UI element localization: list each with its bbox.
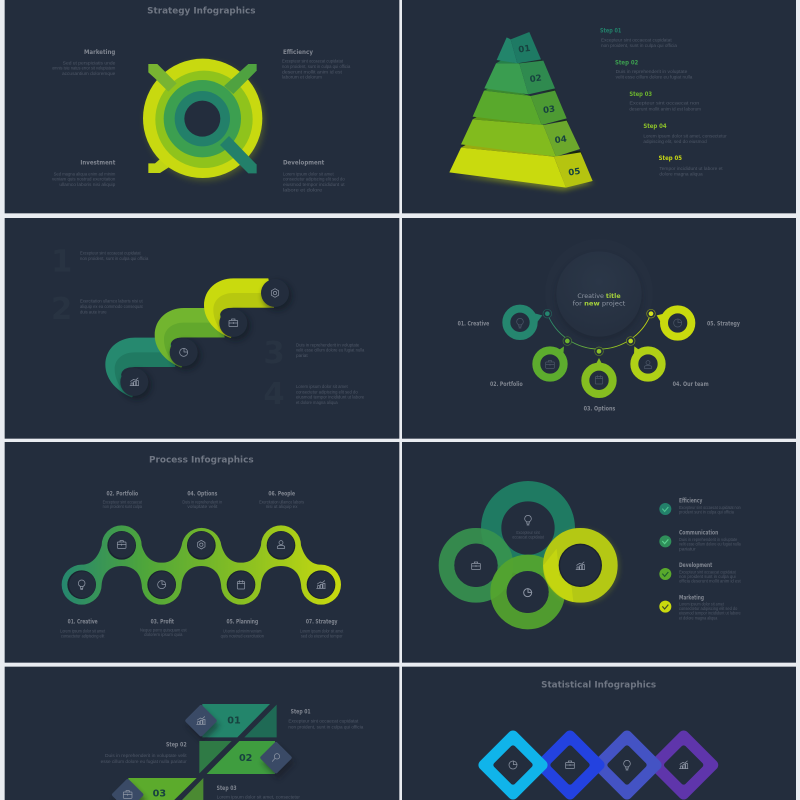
text block: Step 02 [615, 59, 693, 80]
tier 4 [461, 119, 580, 157]
text block: Step 01: Step 01 [291, 709, 311, 716]
hole: pie icon [492, 744, 534, 786]
numbered text: 4: eiusmod tempor incididunt ut labore [296, 395, 365, 400]
text block: Marketing: Marketing [84, 49, 115, 56]
text block: Step 04 [643, 123, 727, 144]
panel: strategy infographics [5, 0, 399, 213]
text block: Step 03: Lorem ipsum dolor sit amet, consectetur [217, 794, 301, 799]
text block: Marketing: omnis iste natus error sit voluptatem [52, 66, 116, 71]
numbered text: 3: velit esse cillum dolore eu fugiat nulla [296, 348, 365, 353]
numbered text: 3: pariat [296, 353, 308, 358]
label: 06. People: 06. People [268, 491, 295, 498]
step 03 shape: 03 [153, 789, 166, 800]
text block: Efficiency: non proident, sunt in culpa qui officia [282, 64, 351, 69]
diamond: indigo [590, 728, 664, 800]
label: 04. Options: voluptate velit [187, 504, 218, 509]
central hub [545, 239, 653, 347]
label: 02. Portfolio: 02. Portfolio [106, 491, 138, 498]
node: gear [187, 531, 216, 560]
hole: chart icon [663, 744, 704, 786]
option 03: Options [584, 347, 616, 412]
label: 03. Profit: dolorem ipsum quia [144, 632, 183, 637]
step 03 shape [111, 778, 203, 800]
panel: pyramid steps [402, 0, 796, 213]
label: 05. Planning: quis nostrud exercitation [221, 633, 264, 638]
label: 01. Creative: Lorem ipsum dolor sit amet [60, 628, 106, 633]
list item: Marketing: consectetur adipiscing elit sed do [679, 606, 738, 611]
ribbon: yellow [204, 278, 274, 338]
numbered text: 2: Exercitation ullamco laboris nisi ut [80, 299, 143, 304]
numbered text: 1: Excepteur sint occaecat cupidatat [80, 251, 141, 256]
list item: Marketing: Marketing [679, 595, 704, 602]
central hub: for new project [573, 301, 626, 308]
text block: Step 03: Step 03 [629, 91, 652, 98]
panel: radial options [402, 218, 796, 439]
ring: pie [498, 563, 557, 621]
text block: Development: consectetur adipiscing elit sed do [283, 177, 345, 182]
numbered text: 1: 1 [51, 244, 72, 279]
central hub: Creative title [577, 293, 621, 300]
text block: Step 01: Excepteur sint occaecat cupidatat [601, 37, 672, 42]
list item: Communication: pariatur [679, 546, 696, 551]
numbered text: 4 [263, 377, 365, 412]
text block: Investment: veniam quis nostrud exercitation [52, 177, 116, 182]
option 02: Portfolio [490, 337, 572, 388]
step 02 shape: 02 [239, 753, 252, 764]
label: 03. Profit: Neque porro quisquam est [140, 627, 187, 632]
label: 07. Strategy: 07. Strategy [306, 618, 338, 625]
text block: Development: eiusmod tempor incididunt ut [283, 182, 345, 187]
label: 07. Strategy: Lorem ipsum dolor sit amet [300, 628, 344, 633]
numbered text: 1 [51, 244, 149, 279]
numbered text: 3 [263, 336, 365, 371]
text block: Investment: ullamco laboris nisi aliquip [59, 182, 116, 187]
ring: bulb: Excepteur sint [516, 530, 540, 535]
ring: chart [543, 529, 619, 604]
text block: Step 02: velit esse cillum dolore eu fugiat nulla [616, 75, 693, 80]
numbered text: 2: aliquip ex ea commodo consequat [80, 304, 143, 309]
node: briefcase [107, 531, 136, 560]
chart: wavy process band [62, 525, 341, 605]
option 01: Creative [458, 309, 552, 336]
diamond: cyan [476, 728, 550, 800]
label: 04. Options [182, 491, 223, 509]
3D pyramid [449, 32, 595, 191]
connector arc [547, 314, 651, 349]
list item: Development: non proident sunt in culpa qui [679, 574, 736, 579]
list item: Development: Excepteur sint occaecat cupidatat [679, 569, 736, 574]
list item: Marketing: Lorem ipsum dolor sit amet [679, 602, 725, 607]
label: 01. Creative: 01. Creative [68, 618, 98, 625]
list item: Development: Development [679, 562, 712, 569]
numbered text: 2 [51, 292, 143, 327]
text block: Step 05: Step 05 [659, 155, 682, 162]
text block: Step 05 [659, 155, 723, 177]
list item: Development [659, 562, 741, 584]
option 05: Strategy [647, 309, 740, 337]
step 01 shape [184, 704, 277, 742]
label: 05. Planning: Ut enim ad minim veniam [223, 628, 262, 633]
list item: Efficiency: Efficiency [679, 497, 702, 504]
text block: Step 01 [600, 27, 678, 48]
text block: Step 01: Step 01 [600, 27, 621, 34]
list item: Communication: velit esse cillum dolore eu fugiat nulla [679, 541, 741, 546]
text block: Step 04: Lorem ipsum dolor sit amet, consectetur [643, 133, 727, 138]
label: 07. Strategy [300, 618, 344, 638]
text block: Marketing: Sed ut perspiciatis unde [63, 60, 116, 65]
label: 06. People: Exercitation ullamco laboris [259, 499, 305, 504]
icon badge: chart [120, 368, 151, 400]
text block: Investment [52, 160, 116, 187]
text block: Step 03: Excepteur sint occaecat non [629, 100, 700, 105]
text block: Efficiency: Efficiency [283, 49, 313, 56]
list item: Efficiency: proident sunt in culpa qui officia [679, 510, 734, 515]
node: user [267, 531, 295, 560]
numbered text: 4: Lorem ipsum dolor sit amet [296, 384, 348, 389]
list item: Development: officia deserunt mollit anim id est [679, 579, 741, 584]
node: calendar [227, 570, 255, 599]
text block: Step 02 [101, 742, 187, 764]
list item: Marketing [659, 595, 741, 620]
list item: Communication: Communication [679, 529, 718, 536]
step 02 shape [199, 741, 295, 779]
numbered text: 2: duis aute irure [80, 310, 107, 315]
panel: statistical infographics [402, 667, 796, 800]
ring: briefcase [446, 536, 505, 595]
icon badge: pie [170, 338, 201, 370]
title: Statistical Infographics: Statistical Infographics [541, 681, 656, 691]
icon badge: briefcase [219, 309, 250, 341]
label: 02. Portfolio: Excepteur sint occaecat [103, 499, 143, 504]
text block: Development: Development [283, 160, 324, 167]
option 03: Options: 03. Options [584, 405, 616, 412]
diamond: blue [533, 728, 607, 800]
numbered text: 4: consectetur adipiscing elit sed do [296, 389, 358, 394]
label: 01. Creative: consectetur adipiscing elit [61, 633, 105, 638]
text block: Marketing [52, 49, 116, 76]
text block: Investment: Sed magna aliqua enim ad minim [54, 171, 116, 176]
text block: Step 05: Tempor incididunt ut labore et [659, 166, 723, 171]
tier 1 [497, 32, 541, 63]
tier 5 [449, 148, 593, 188]
text block: Efficiency: deserunt mollit anim id est [282, 69, 343, 74]
ribbon: teal [105, 338, 175, 397]
ribbon: green [155, 308, 225, 368]
text block: Step 04: Step 04 [643, 123, 667, 130]
label: 03. Profit: 03. Profit [151, 618, 174, 625]
text block: Step 05: dolore magna aliqua [659, 172, 703, 177]
text block: Step 02: Step 02 [166, 742, 187, 749]
panel: stepped ribbons [5, 218, 399, 439]
tier 4: 04 [554, 135, 567, 146]
text block: Step 02: Duis in reprehenderit in voluptate velit [105, 753, 187, 758]
numbered text: 3: 3 [263, 336, 285, 371]
tier 3: 03 [542, 105, 556, 116]
title: Strategy Infographics: Strategy Infographics [147, 6, 255, 16]
text block: Step 01 [288, 709, 364, 730]
ring: bulb [491, 491, 565, 565]
diamond: purple [647, 728, 720, 800]
text block: Marketing: accusantium doloremque [62, 71, 116, 76]
node: pie [147, 570, 176, 599]
text block: Step 04: adipiscing elit, sed do eiusmod [643, 139, 707, 144]
step 01 shape: 01 [227, 716, 241, 727]
label: 06. People: nisi ut aliquip ex [266, 504, 298, 509]
numbered text: 4: et dolore magna aliqua [296, 400, 338, 405]
panel: process infographics [5, 442, 399, 663]
text block: Development: Lorem ipsum dolor sit amet [283, 171, 334, 176]
label: 01. Creative [60, 618, 106, 638]
label: 02. Portfolio: non proident sunt culpa [103, 504, 142, 509]
text block: Step 03: Step 03 [217, 785, 237, 792]
title: Process Infographics: Process Infographics [149, 456, 254, 466]
option 05: Strategy: 05. Strategy [707, 320, 740, 327]
tier 3 [473, 91, 567, 125]
panel: diagonal steps [5, 667, 399, 800]
label: 07. Strategy: sed do eiusmod tempor [301, 633, 343, 638]
label: 05. Planning: 05. Planning [226, 618, 258, 625]
label: 04. Options: 04. Options [187, 491, 218, 498]
text block: Efficiency [282, 49, 351, 80]
text block: Development: labore et dolore [283, 187, 323, 192]
text block: Efficiency: laborum et dolorum [282, 75, 322, 80]
text block: Step 02: Step 02 [615, 59, 638, 66]
option 02: Portfolio: 02. Portfolio [490, 381, 523, 388]
text block: Step 01: non proident, sunt in culpa qui officia [601, 43, 678, 48]
label: 02. Portfolio [103, 491, 143, 509]
tier 2: 02 [529, 74, 542, 85]
option 04: Our team: 04. Our team [673, 381, 709, 388]
list item: Marketing: eiusmod tempor incididunt ut labore [679, 611, 741, 616]
text block: Step 03 [217, 785, 301, 799]
ring: bulb: occaecat cupidatat [512, 535, 544, 540]
panel: overlapping rings [402, 442, 796, 663]
option 01: Creative: 01. Creative [458, 320, 489, 327]
tier 1: 01 [518, 44, 531, 55]
icon badge: gear [261, 279, 292, 311]
text block: Step 03: deserunt mollit anim id est laborum [629, 106, 701, 111]
label: 03. Profit [140, 618, 187, 637]
numbered text: 2: 2 [51, 292, 72, 327]
label: 06. People [259, 491, 305, 509]
text block: Efficiency: Excepteur sint occaecat cupidatat [282, 59, 344, 64]
option 04: Our team [626, 337, 709, 388]
text block: Development [283, 160, 345, 192]
numbered text: 3: Duis in reprehenderit in voluptate [296, 342, 360, 347]
tier 5: 05 [568, 167, 581, 178]
node: bulb [67, 570, 96, 599]
list item: Marketing: et dolore magna aliqua [679, 615, 718, 620]
list item: Communication [659, 529, 741, 551]
chart: concentric target with crossed arms [143, 59, 264, 181]
list item: Communication: Duis in reprehenderit in voluptate [679, 537, 738, 542]
text block: Investment: Investment [80, 160, 115, 167]
node: chart [307, 570, 335, 599]
text block: Step 03 [629, 91, 701, 111]
numbered text: 1: non proident, sunt in culpa qui officia [80, 256, 149, 261]
text block: Step 02: esse cillum dolore eu fugiat nulla pariatur [101, 759, 187, 764]
label: 04. Options: Duis in reprehenderit in [182, 499, 223, 504]
text block: Step 01: non proident, sunt in culpa qui officia [288, 725, 364, 730]
list item: Efficiency [659, 497, 741, 515]
text block: Step 01: Excepteur sint occaecat cupidatat [288, 719, 359, 724]
list item: Efficiency: Excepteur sint occaecat cupidatat non [679, 505, 741, 510]
label: 05. Planning [221, 618, 264, 638]
hole: bulb icon [606, 744, 648, 786]
tier 2 [484, 61, 555, 94]
numbered text: 4: 4 [263, 377, 285, 412]
text block: Step 02: Duis in reprehenderit in voluptate [616, 69, 688, 74]
hole: briefcase icon [549, 744, 591, 786]
